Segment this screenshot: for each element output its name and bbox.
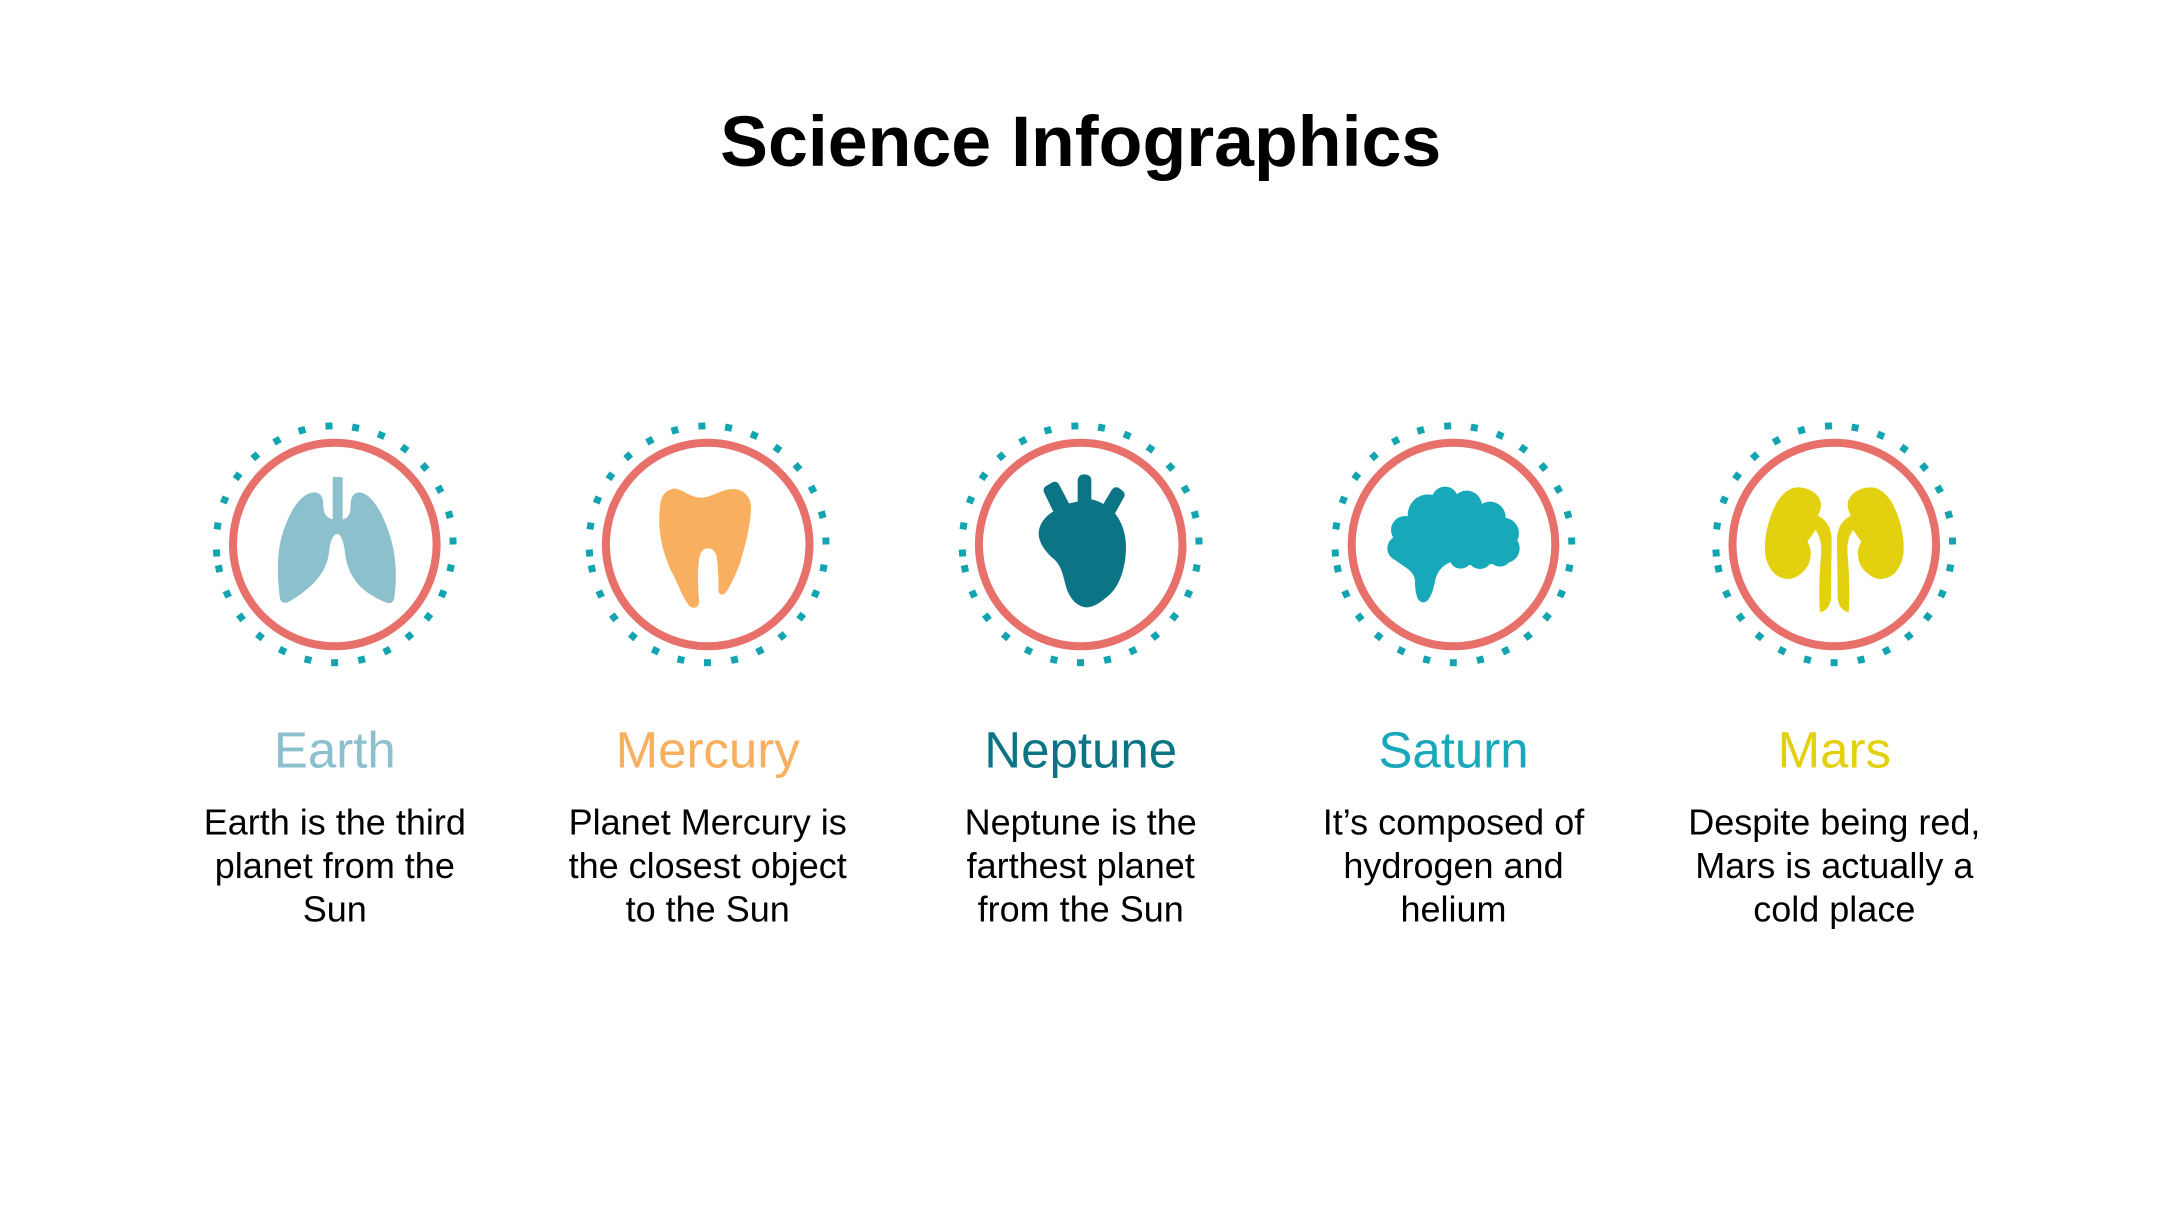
name: Mercury: Mercury (616, 722, 800, 778)
red ring: Neptune (979, 443, 1182, 646)
description: Neptune: from the Sun (978, 888, 1184, 930)
description: Earth: Sun (303, 888, 367, 930)
description: Mars: cold place (1753, 888, 1915, 930)
title: Science Infographics (720, 102, 1441, 182)
name: Saturn: Saturn (1378, 722, 1529, 778)
description: Mercury: Planet Mercury is (569, 802, 847, 842)
description: Mars: Despite being red, (1688, 802, 1980, 842)
name: Earth: Earth (274, 722, 396, 778)
dotted ring: Earth (213, 422, 457, 666)
description: Mercury: to the Sun (626, 888, 790, 930)
dotted ring: Mars (1712, 422, 1956, 666)
dotted ring: Neptune (959, 422, 1203, 666)
dotted ring: Saturn (1332, 422, 1575, 666)
panel: Earth (204, 422, 466, 930)
panel: Mars (1688, 422, 1980, 930)
red ring: Earth (233, 443, 437, 646)
description: Saturn: hydrogen and (1343, 845, 1564, 886)
panel: Mercury (569, 422, 847, 930)
description: Neptune: farthest planet (967, 845, 1195, 886)
icon: lungs (278, 477, 396, 603)
panel: Saturn (1323, 422, 1585, 930)
description: Saturn: helium (1400, 888, 1507, 930)
dotted ring: Mercury (586, 422, 830, 666)
description: Mars: Mars is actually a (1695, 845, 1974, 886)
name: Mars: Mars (1778, 722, 1891, 778)
red ring: Mercury (606, 443, 810, 646)
description: Neptune: Neptune is the (965, 802, 1197, 842)
red ring: Mars (1732, 443, 1936, 646)
icon: brain (1387, 487, 1520, 602)
icon: tooth (659, 489, 751, 608)
description: Saturn: It’s composed of (1323, 802, 1585, 842)
description: Earth: Earth is the third (204, 802, 466, 842)
description: Earth: planet from the (215, 845, 455, 886)
panel: Neptune (959, 422, 1203, 930)
red ring: Saturn (1352, 443, 1555, 646)
description: Mercury: the closest object (569, 845, 847, 886)
name: Neptune: Neptune (984, 722, 1177, 778)
icon: kidneys (1765, 487, 1904, 612)
icon: heart (1039, 474, 1126, 607)
